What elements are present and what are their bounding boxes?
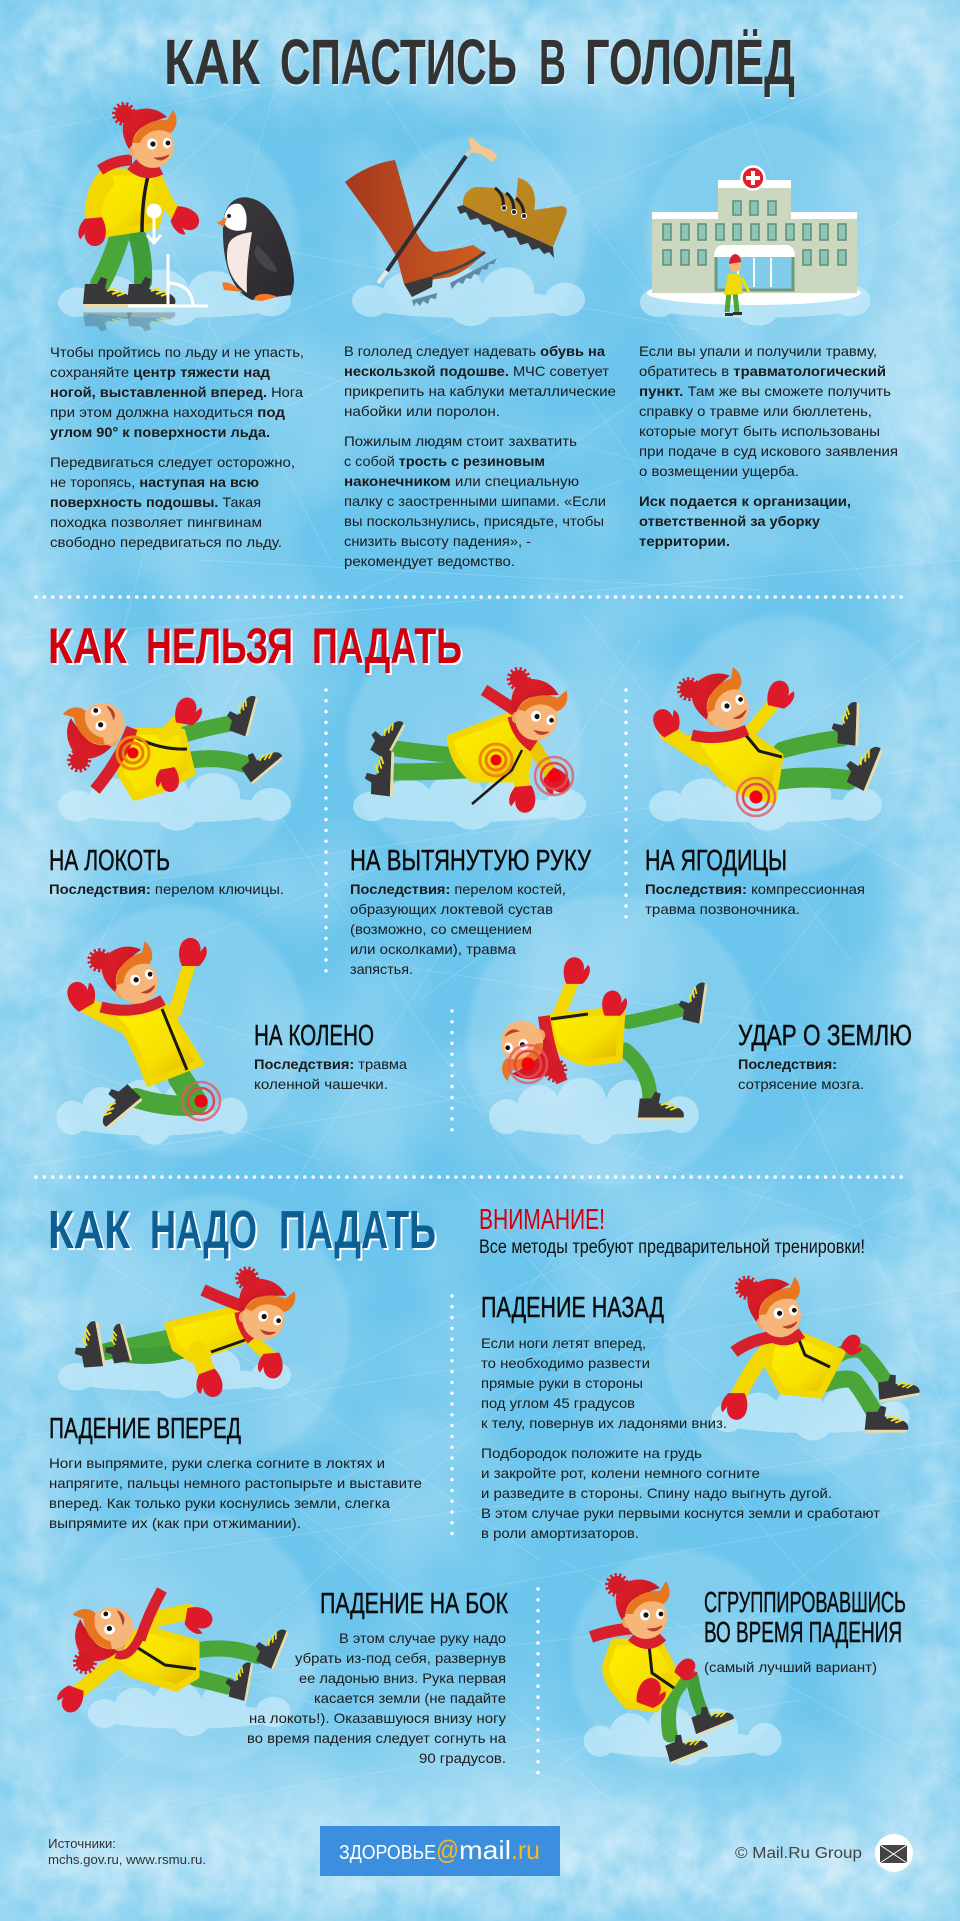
heading: how not to fall: КАК — [48, 618, 127, 674]
panel: on the outstretched arm — [350, 668, 591, 977]
text: to the side: на локоть!). Оказавшуюся внизу ногу — [249, 1710, 506, 1726]
text: fall backward: В этом случае руки первыми коснутся земли и сработают — [481, 1505, 881, 1521]
heading: how to fall: НАДО — [150, 1200, 257, 1260]
text: balance: походка позволяет пингвинам — [50, 514, 262, 530]
text: trauma unit: Если вы упали и получили травму, — [639, 343, 877, 359]
illustration: penguin — [217, 197, 294, 301]
heading: how not to fall: НЕЛЬЗЯ — [146, 618, 293, 674]
text: training required: Все методы требуют предварительной тренировки! — [479, 1237, 865, 1258]
text: fall backward: прямые руки в стороны — [481, 1375, 643, 1391]
text: footwear: Пожилым людям стоит захватить — [344, 433, 577, 449]
heading: how not to fall: ПАДАТЬ — [312, 618, 462, 674]
illustration: boy hitting head — [496, 957, 708, 1120]
illustration: boy falling on elbow — [57, 691, 284, 797]
callout: warning — [479, 1204, 865, 1258]
illustration: small boy — [724, 254, 749, 316]
text: fall backward: в роли амортизаторов. — [481, 1525, 639, 1541]
text: balance: Передвигаться следует осторожно, — [50, 454, 295, 470]
footer: logo: ЗДОРОВЬЕ — [339, 1842, 436, 1864]
heading: fall forward: ПАДЕНИЕ ВПЕРЕД — [49, 1413, 241, 1445]
panel: fall forward — [49, 1267, 422, 1531]
icon: ice cloud — [58, 772, 291, 831]
heading: how to fall: КАК — [48, 1200, 131, 1260]
panel: tucked fall — [584, 1576, 906, 1766]
text: arm consequence: запястья. — [350, 961, 413, 977]
icon: ice cloud — [58, 270, 291, 326]
text: to the side: во время падения следует согнуть на — [247, 1730, 506, 1746]
text: buttocks consequence: травма позвоночника. — [645, 901, 800, 917]
icon: ice cloud — [712, 1386, 910, 1440]
text: fall forward: Ноги выпрямите, руки слегка согните в локтях и — [49, 1455, 385, 1471]
panel: footwear and cane — [344, 138, 616, 569]
icon: ice cloud — [88, 1682, 291, 1736]
panel: balance on ice — [50, 105, 304, 550]
text: to the side: В этом случае руку надо — [339, 1630, 506, 1646]
heading: knee: НА КОЛЕНО — [254, 1020, 374, 1052]
text: trauma unit: при подаче в суд искового заявления — [639, 443, 898, 459]
illustration: spiked shoe — [457, 178, 567, 258]
text: footwear: снизить высоту падения», - — [344, 533, 531, 549]
text: fall forward: вперед. Как только руки коснулись земли, слегка — [49, 1495, 390, 1511]
text: best option: (самый лучший вариант) — [704, 1659, 877, 1675]
text: fall forward — [49, 1455, 422, 1531]
text: fall forward: выпрямите их (как при отжимании). — [49, 1515, 301, 1531]
illustration: boot — [345, 160, 497, 307]
panel: on the knee — [56, 935, 407, 1145]
text: buttocks consequence: Последствия: компрессионная — [645, 881, 865, 897]
text: head strike consequence: Последствия: — [738, 1056, 837, 1072]
text: arm consequence: образующих локтевой сустав — [350, 901, 553, 917]
heading: buttocks: НА ЯГОДИЦЫ — [645, 845, 787, 877]
text: fall backward: Подбородок положите на грудь — [481, 1445, 702, 1461]
icon: ice cloud — [56, 1080, 247, 1145]
text: arm consequence: Последствия: перелом костей, — [350, 881, 566, 897]
text: footwear: вы поскользнулись, присядьте, чтобы — [344, 513, 604, 529]
text: arm consequence: (возможно, со смещением — [350, 921, 532, 937]
text: arm consequence — [350, 881, 566, 977]
heading: outstretched arm: НА ВЫТЯНУТУЮ РУКУ — [350, 845, 591, 877]
text: fall backward: и закройте рот, колени немного согните — [481, 1465, 760, 1481]
text: to the side — [247, 1630, 506, 1766]
text: balance: сохраняйте центр тяжести над — [50, 364, 270, 380]
text: to the side: ее ладонью вниз. Рука первая — [299, 1670, 506, 1686]
icon: centre of gravity and 90 degree angle — [128, 204, 208, 306]
text: footwear: нескользкой подошве. МЧС советует — [344, 363, 610, 379]
text: trauma unit: пункт. Там же вы сможете получить — [639, 383, 891, 399]
heading: head strike: УДАР О ЗЕМЛЮ — [738, 1020, 912, 1052]
text: footwear — [344, 343, 616, 569]
icon: envelope — [875, 1834, 913, 1872]
icon: ice cloud — [649, 772, 882, 831]
icon: ice cloud — [353, 774, 586, 830]
text: trauma unit: Иск подается к организации, — [639, 493, 851, 509]
footer: copyright: © Mail.Ru Group — [735, 1845, 862, 1862]
text: knee consequence: Последствия: травма — [254, 1056, 407, 1072]
footer: logo: mail — [459, 1835, 511, 1865]
text: footwear: прикрепить на каблуки металлические — [344, 383, 616, 399]
text: balance — [50, 344, 304, 550]
text: trauma unit: территории. — [639, 533, 730, 549]
heading: how not to fall — [48, 618, 462, 674]
text: balance: не торопясь, наступая на всю — [50, 474, 259, 490]
heading: to the side: ПАДЕНИЕ НА БОК — [320, 1588, 508, 1620]
text: fall forward: напрягите, пальцы немного растопырьте и выставите — [49, 1475, 422, 1491]
illustration: boy falling on arm — [364, 668, 574, 814]
text: fall backward — [481, 1335, 881, 1541]
text: balance: при этом должна находиться под — [50, 404, 285, 420]
illustration: boy falling sideways — [54, 1590, 289, 1715]
text: fall backward: то необходимо развести — [481, 1355, 650, 1371]
panel: trauma unit — [639, 166, 898, 549]
text: knee consequence: коленной чашечки. — [254, 1076, 388, 1092]
heading: tucked — [704, 1587, 906, 1649]
panel: on the buttocks — [645, 661, 884, 917]
text: trauma unit — [639, 343, 898, 549]
illustration: boy tucked — [591, 1576, 735, 1764]
text: knee consequence — [254, 1056, 407, 1092]
text: trauma unit: обратитесь в травматологический — [639, 363, 886, 379]
text: fall backward: и разведите в стороны. Спину надо выгнуть дугой. — [481, 1485, 832, 1501]
text: trauma unit: которые могут быть использованы — [639, 423, 880, 439]
text: fall backward: под углом 45 градусов — [481, 1395, 635, 1411]
heading: how to fall: ПАДАТЬ — [279, 1200, 436, 1260]
footer: logo: .ru — [511, 1835, 540, 1865]
illustration: hospital — [647, 166, 861, 305]
text: elbow consequence: Последствия: перелом ключицы. — [49, 881, 284, 897]
heading: on the elbow: НА ЛОКОТЬ — [49, 845, 170, 877]
illustration: walking cane — [378, 138, 497, 283]
text: balance: Чтобы пройтись по льду и не упасть, — [50, 344, 304, 360]
text: footwear: палку с заостренными шипами. «Если — [344, 493, 606, 509]
text: trauma unit: ответственной за уборку — [639, 513, 820, 529]
text: arm consequence: или осколками), травма — [350, 941, 516, 957]
text: footwear: наконечником или специальную — [344, 473, 579, 489]
title: ГОЛОЛЁД — [585, 26, 795, 98]
footer: sources: mchs.gov.ru, www.rsmu.ru. — [48, 1852, 206, 1867]
illustration: boy falling on buttocks — [649, 661, 884, 816]
illustration: boy falling forward — [70, 1267, 300, 1402]
title: КАК — [164, 26, 261, 98]
text: fall backward: к телу, повернув их ладонями вниз. — [481, 1415, 727, 1431]
text: footwear: набойки или поролон. — [344, 403, 500, 419]
icon: ice cloud — [58, 1346, 291, 1398]
text: buttocks consequence — [645, 881, 865, 917]
text: trauma unit: справку о травме или бюллетень, — [639, 403, 872, 419]
panel: fall to the side — [54, 1588, 508, 1766]
footer: sources: Источники: — [48, 1836, 116, 1851]
text: head strike consequence: сотрясение мозга. — [738, 1076, 864, 1092]
text: fall backward: Если ноги летят вперед, — [481, 1335, 646, 1351]
text: balance: ногой, выставленной вперед. Нога — [50, 384, 303, 400]
icon: ice cloud — [352, 266, 585, 326]
title: В — [539, 26, 566, 98]
panel: on the elbow — [49, 691, 291, 897]
text: to the side: убрать из-под себя, развернув — [295, 1650, 506, 1666]
illustration: boy walking on ice — [77, 105, 203, 331]
panel: head strike — [489, 957, 912, 1144]
text: footwear: рекомендует ведомство. — [344, 553, 515, 569]
text: head strike consequence — [738, 1056, 864, 1092]
text: to the side: 90 градусов. — [419, 1750, 506, 1766]
icon: ice cloud — [489, 1078, 699, 1144]
text: footwear: В гололед следует надевать обувь на — [344, 343, 605, 359]
text: balance: свободно передвигаться по льду. — [50, 534, 282, 550]
text: balance: углом 90° к поверхности льда. — [50, 424, 270, 440]
title: СПАСТИСЬ — [280, 26, 517, 98]
panel: fall backward — [481, 1271, 920, 1541]
footer: logo: @ — [436, 1835, 459, 1865]
text: footwear: с собой трость с резиновым — [344, 453, 545, 469]
illustration: boy falling backward — [721, 1271, 920, 1433]
heading: how to fall — [48, 1200, 436, 1260]
dividers — [36, 597, 905, 1777]
heading: attention: ВНИМАНИЕ! — [479, 1204, 605, 1236]
icon: ice cloud — [640, 270, 871, 326]
title — [164, 26, 795, 98]
illustration: boy falling on knee — [63, 935, 220, 1129]
icon: ice cloud — [584, 1707, 782, 1766]
text: trauma unit: о возмещении ущерба. — [639, 463, 799, 479]
footer: logo — [320, 1826, 560, 1876]
text: to the side: касается земли (не падайте — [314, 1690, 506, 1706]
heading: fall backward: ПАДЕНИЕ НАЗАД — [481, 1292, 664, 1324]
text: balance: поверхность подошвы. Такая — [50, 494, 261, 510]
footer: sources — [48, 1836, 206, 1867]
